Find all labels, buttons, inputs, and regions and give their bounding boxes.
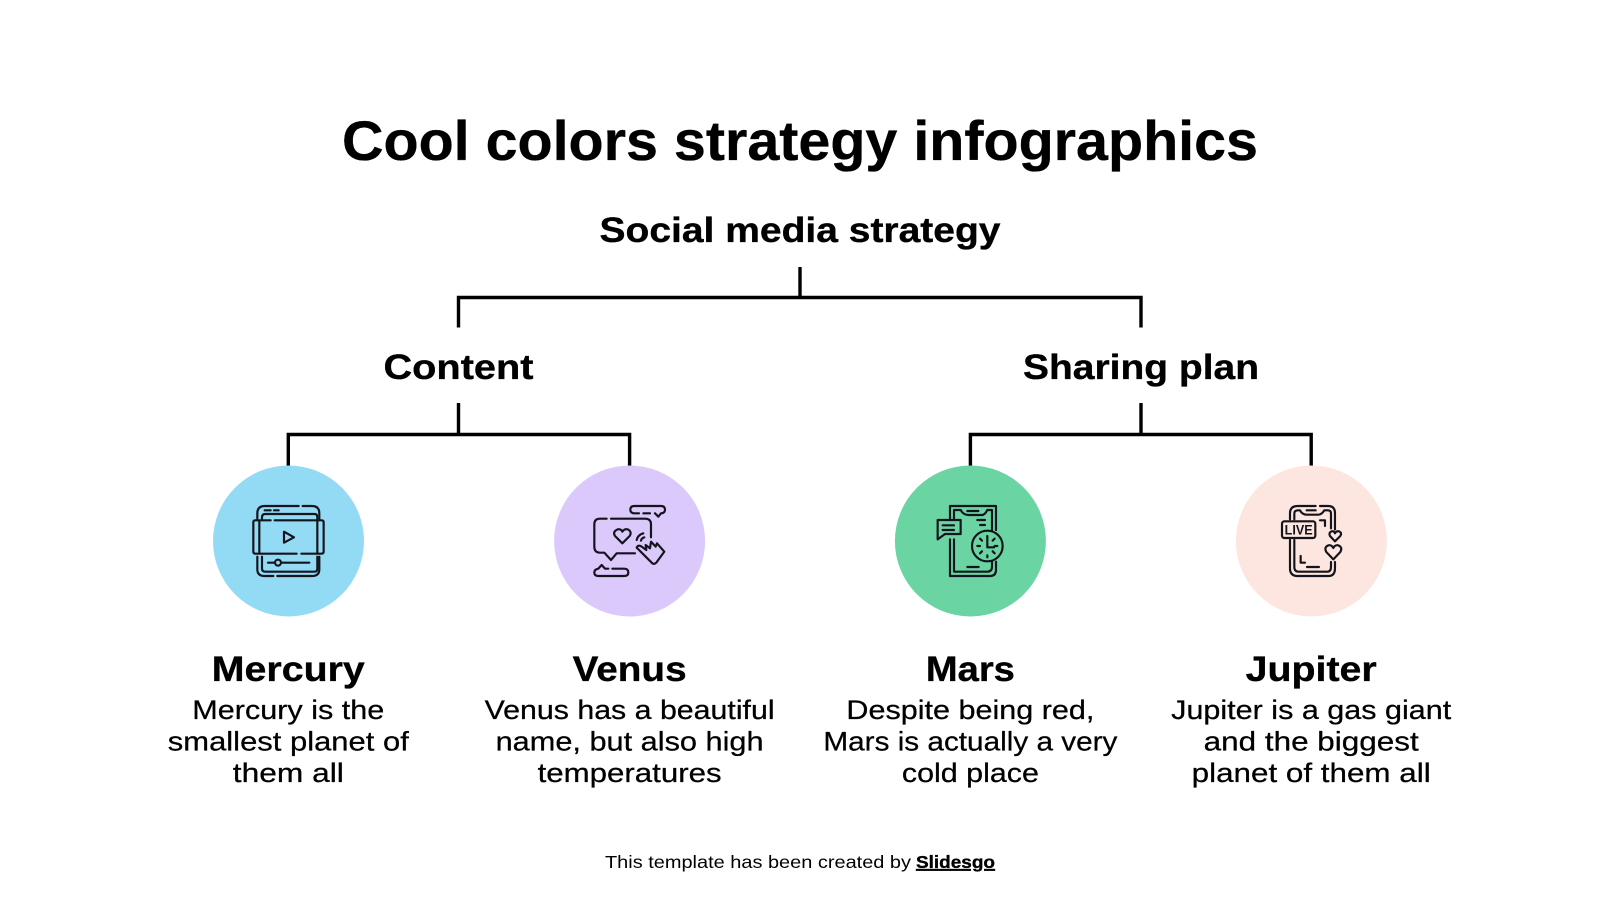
- connector: root to branches: [458, 267, 1141, 328]
- icon: chat bubble with heart and tapping hand: [594, 506, 665, 576]
- description: venus: [485, 695, 775, 788]
- circle: venus: [554, 466, 705, 616]
- icon: video player tablet: [253, 506, 324, 576]
- description: jupiter: [1171, 695, 1452, 788]
- title: Cool colors strategy infographics: [342, 109, 1258, 172]
- panel: jupiter: [1171, 466, 1452, 788]
- description: mercury: them all: [233, 758, 344, 788]
- description: mercury: Mercury is the: [192, 695, 384, 725]
- icon: live stream phone with hearts: [1282, 506, 1341, 576]
- circle: mars: [895, 466, 1046, 616]
- heading: content: Content: [384, 347, 534, 387]
- description: mercury: [168, 695, 410, 788]
- icon: live stream phone with hearts: LIVE: [1285, 522, 1313, 538]
- heading: sharing plan: Sharing plan: [1023, 347, 1259, 387]
- description: mars: Despite being red,: [846, 695, 1094, 725]
- description: venus: name, but also high: [496, 726, 764, 756]
- footer credit: Slidesgo: [916, 852, 995, 872]
- description: jupiter: Jupiter is a gas giant: [1171, 695, 1452, 725]
- footer credit: [605, 852, 995, 872]
- description: jupiter: planet of them all: [1192, 758, 1431, 788]
- icon: phone with clock and chat: [938, 506, 1003, 576]
- panel: venus: [485, 466, 775, 788]
- label: jupiter: Jupiter: [1246, 649, 1377, 689]
- description: jupiter: and the biggest: [1204, 726, 1419, 756]
- circle: mercury: [213, 466, 364, 616]
- label: venus: Venus: [573, 649, 687, 689]
- description: mars: cold place: [902, 758, 1039, 788]
- label: mercury: Mercury: [212, 649, 365, 689]
- description: mars: [823, 695, 1118, 788]
- label: mars: Mars: [926, 649, 1015, 689]
- footer credit: This template has been created by: [605, 852, 911, 872]
- connector: content to children: [288, 403, 630, 466]
- description: venus: Venus has a beautiful: [485, 695, 775, 725]
- connector: sharing plan to children: [970, 403, 1311, 466]
- description: venus: temperatures: [538, 758, 722, 788]
- panel: mercury: [168, 466, 410, 788]
- description: mars: Mars is actually a very: [823, 726, 1118, 756]
- heading: social media strategy: Social media strategy: [600, 210, 1001, 250]
- panel: mars: [823, 466, 1118, 788]
- description: mercury: smallest planet of: [168, 726, 410, 756]
- circle: jupiter: [1236, 466, 1387, 616]
